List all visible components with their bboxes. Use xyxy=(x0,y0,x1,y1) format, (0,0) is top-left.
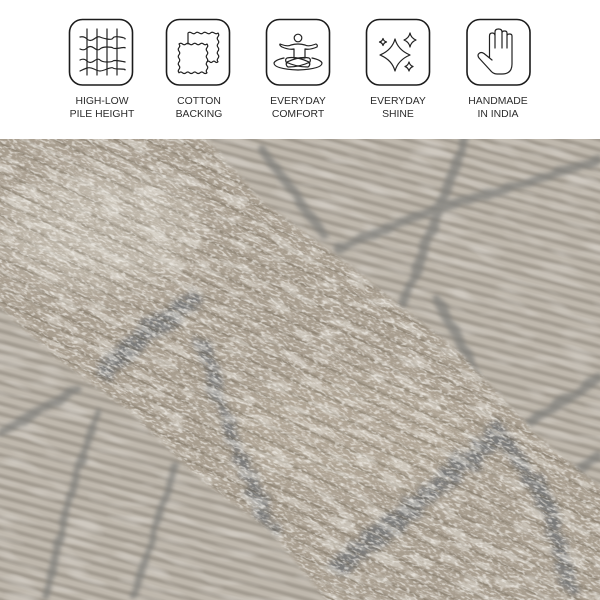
grey lattice lines on flat rug xyxy=(2,139,598,596)
icon: everyday comfort xyxy=(266,20,330,85)
label: cotton backing: COTTON xyxy=(177,96,221,107)
feature: handmade in india xyxy=(467,20,530,120)
label: cotton backing: BACKING xyxy=(176,109,222,120)
yarn ridges xyxy=(0,139,600,600)
label: high-low pile height: HIGH-LOW xyxy=(75,96,129,107)
label: everyday comfort: EVERYDAY xyxy=(270,96,326,107)
roll lighting xyxy=(0,164,204,296)
flat rug background with stripes xyxy=(0,139,600,600)
icon: high-low pile height xyxy=(70,20,132,85)
label: handmade in india: IN INDIA xyxy=(478,109,519,120)
icon: open hand xyxy=(467,20,530,85)
rug photo close-up xyxy=(0,139,600,600)
yarn dark flecks xyxy=(0,139,600,600)
yarn light loops xyxy=(0,139,600,600)
grey motif on roll xyxy=(105,300,570,585)
feature icons row xyxy=(70,20,530,120)
label: everyday shine: SHINE xyxy=(382,109,414,120)
label: high-low pile height: PILE HEIGHT xyxy=(70,109,135,120)
white yarn clusters xyxy=(0,139,600,600)
rolled rug section xyxy=(0,139,600,600)
label: everyday comfort: COMFORT xyxy=(272,109,325,120)
label: handmade in india: HANDMADE xyxy=(468,96,528,107)
icon: everyday shine xyxy=(366,20,430,85)
feature: cotton backing xyxy=(166,20,230,120)
label: everyday shine: EVERYDAY xyxy=(370,96,426,107)
feature: high-low pile height xyxy=(70,20,135,120)
roll base colour xyxy=(0,139,600,600)
feature: everyday comfort xyxy=(266,20,330,120)
feature: everyday shine xyxy=(366,20,430,120)
icon: cotton backing xyxy=(166,20,230,85)
